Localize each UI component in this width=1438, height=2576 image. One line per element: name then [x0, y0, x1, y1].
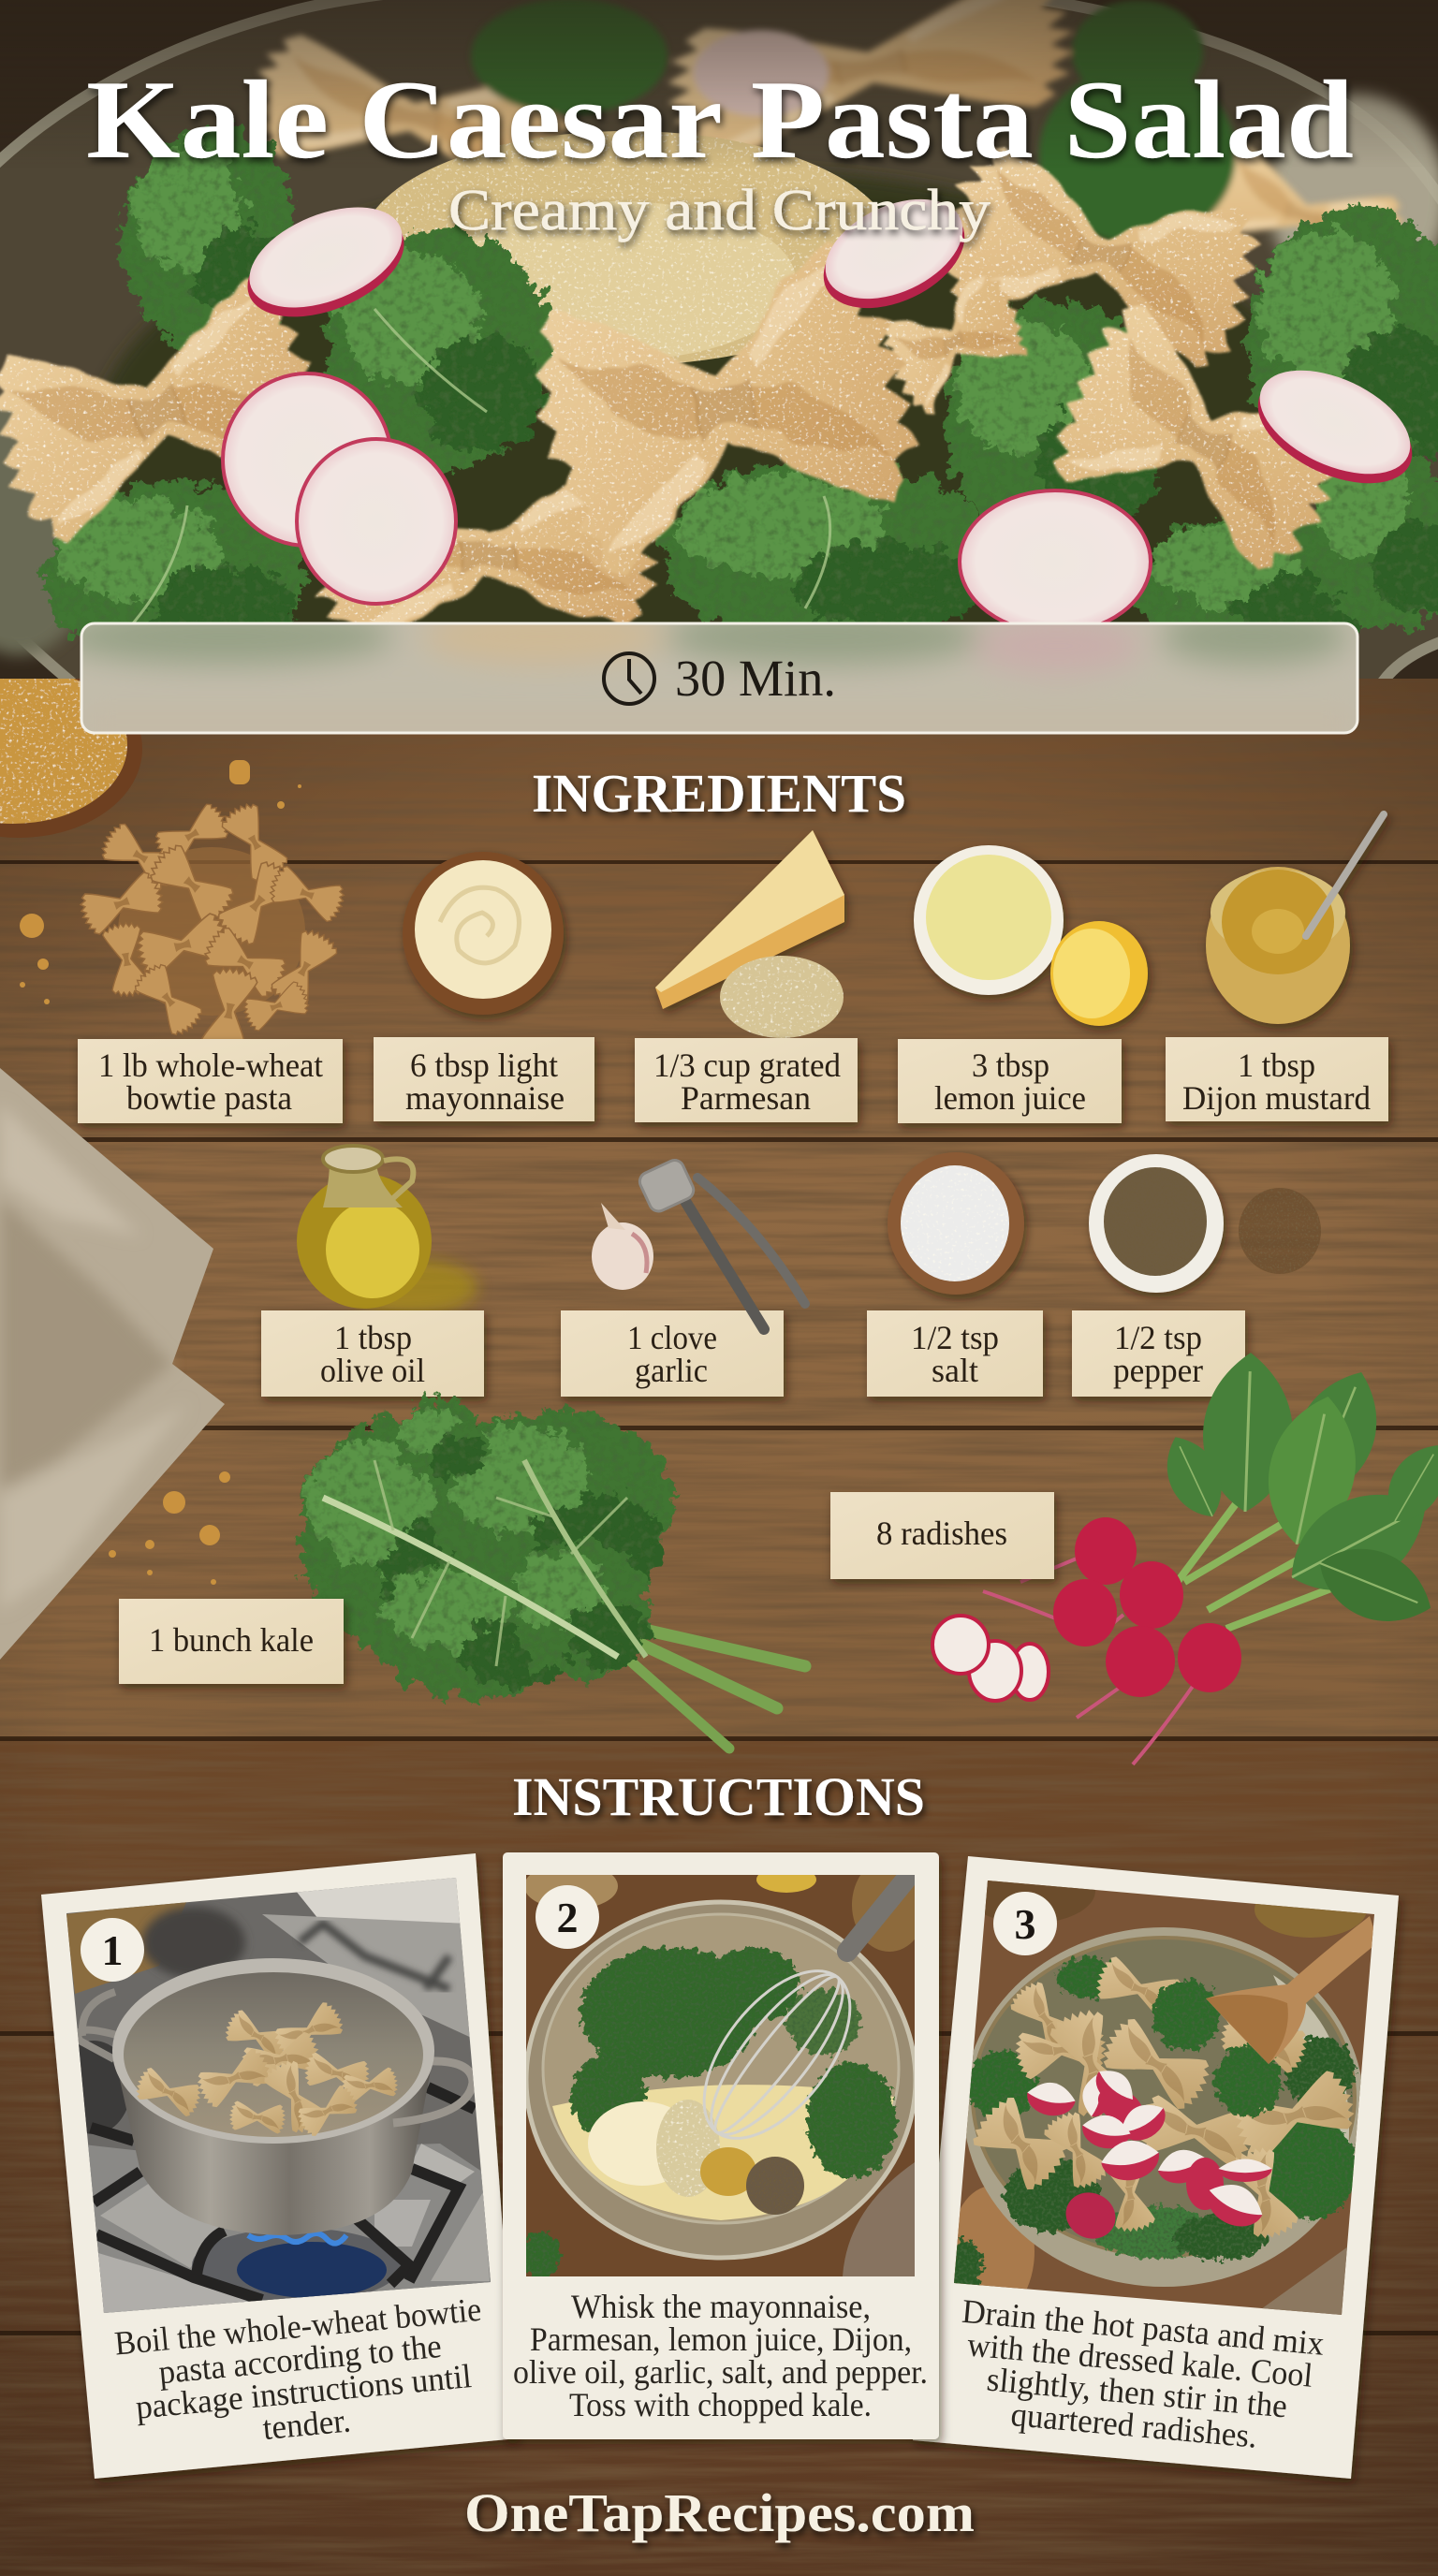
label: dijon: Dijon mustard [1182, 1079, 1371, 1117]
label: lemon juice: lemon juice [934, 1079, 1086, 1117]
ingredient: kale bunch [300, 1399, 805, 1749]
radish slices [223, 179, 1429, 633]
heading: instructions: INSTRUCTIONS [512, 1766, 925, 1827]
step text 1 [113, 2291, 492, 2460]
step card 1 [41, 1853, 518, 2479]
parmesan mound [360, 131, 894, 365]
label: mayonnaise: 6 tbsp light [410, 1046, 558, 1084]
ingredient: radish greens [1153, 1351, 1438, 1639]
icon: clock [604, 653, 654, 704]
labels row 2 [261, 1310, 1245, 1397]
label: pepper: 1/2 tsp [1114, 1319, 1202, 1356]
footer: website: OneTapRecipes.com [464, 2482, 975, 2543]
label: dijon [1166, 1037, 1388, 1121]
kale leaves [43, 126, 1438, 669]
hero photo: pasta salad bowl [0, 0, 1438, 711]
ingredient: garlic press [637, 1157, 805, 1329]
label: pasta: 1 lb whole-wheat [98, 1046, 323, 1084]
label: pepper: pepper [1113, 1352, 1203, 1389]
photo: mixing bowl [522, 1858, 927, 2280]
label: kale [119, 1599, 344, 1684]
step text 3: slightly, then stir in the [985, 2360, 1289, 2425]
label: salt [867, 1310, 1043, 1397]
label: garlic: 1 clove [627, 1319, 717, 1356]
label: mayonnaise [374, 1037, 594, 1121]
step number 3 [993, 1892, 1057, 1955]
step number 1 [81, 1918, 144, 1982]
step text 1: package instructions until [134, 2357, 473, 2426]
step text 3: quartered radishes. [1009, 2395, 1259, 2455]
label: radishes: 8 radishes [876, 1515, 1007, 1552]
subtitle: Creamy and Crunchy [448, 179, 990, 242]
napkin [0, 1068, 225, 1660]
time bar [56, 608, 1357, 744]
label: radishes [830, 1492, 1054, 1579]
label: pasta: bowtie pasta [126, 1079, 292, 1117]
labels row 1 [78, 1037, 1388, 1123]
ingredient: parmesan [655, 830, 844, 1038]
photo: finished salad [942, 1858, 1386, 2321]
pepper scatter [1239, 1188, 1321, 1274]
title: Kale Caesar Pasta Salad [86, 57, 1354, 182]
ingredient: garlic [592, 1203, 653, 1290]
step card 3 [913, 1856, 1399, 2479]
label: lemon juice: 3 tbsp [972, 1046, 1049, 1084]
ingredient: pepper [1089, 1154, 1224, 1293]
step text 2: Whisk the mayonnaise, [571, 2288, 871, 2325]
step text 3: with the dressed kale. Cool [966, 2325, 1314, 2394]
step number 1: 1 [101, 1926, 124, 1974]
step number 2 [536, 1885, 599, 1949]
pot [114, 2055, 433, 2235]
step number 2: 2 [556, 1894, 579, 1941]
time text: 30 Min. [675, 650, 836, 707]
step number 3: 3 [1015, 1900, 1035, 1948]
crumbs [20, 760, 301, 1585]
label: olive oil [261, 1310, 484, 1397]
label: mayonnaise: mayonnaise [405, 1079, 565, 1117]
label: kale: 1 bunch kale [149, 1621, 314, 1659]
ingredient: mustard [1206, 814, 1384, 1024]
heading: ingredients: INGREDIENTS [532, 763, 906, 824]
step text 2 [513, 2288, 928, 2423]
label: olive oil: 1 tbsp [334, 1319, 412, 1356]
step text 3 [951, 2292, 1326, 2460]
step card 2 [503, 1852, 939, 2439]
bowtie pasta [0, 146, 1335, 622]
step text 1: Boil the whole-wheat bowtie [113, 2291, 483, 2363]
photo: pot on stove [56, 1872, 506, 2321]
icon: spice bowl [0, 679, 142, 838]
label: pepper [1072, 1310, 1245, 1397]
step text 1: tender. [261, 2401, 352, 2447]
step text 2: Parmesan, lemon juice, Dijon, [530, 2320, 912, 2358]
step text 2: olive oil, garlic, salt, and pepper. [513, 2353, 928, 2391]
step text 2: Toss with chopped kale. [569, 2386, 872, 2423]
label: parmesan [635, 1038, 858, 1122]
wood table background [0, 679, 1438, 2576]
label: parmesan: 1/3 cup grated [653, 1046, 841, 1084]
label: dijon: 1 tbsp [1238, 1046, 1315, 1084]
label: parmesan: Parmesan [681, 1079, 811, 1117]
step text 3: Drain the hot pasta and mix [961, 2292, 1326, 2363]
ingredient: pasta [76, 798, 348, 1058]
label: garlic: garlic [635, 1352, 708, 1389]
label: lemon juice [898, 1039, 1122, 1123]
ingredient: salt [888, 1152, 1024, 1295]
label: pasta [78, 1039, 343, 1123]
ingredient: mayonnaise [403, 852, 564, 1015]
ingredient: radishes [932, 1517, 1241, 1764]
ingredient: olive oil [297, 1146, 477, 1315]
step text 1: pasta according to the [157, 2327, 443, 2391]
label: salt: salt [932, 1352, 978, 1389]
label: salt: 1/2 tsp [911, 1319, 999, 1356]
label: garlic [561, 1310, 784, 1397]
label: olive oil: olive oil [320, 1352, 425, 1389]
ingredient: lemon juice [914, 845, 1148, 1026]
top blurred ingredients [257, 0, 1405, 240]
